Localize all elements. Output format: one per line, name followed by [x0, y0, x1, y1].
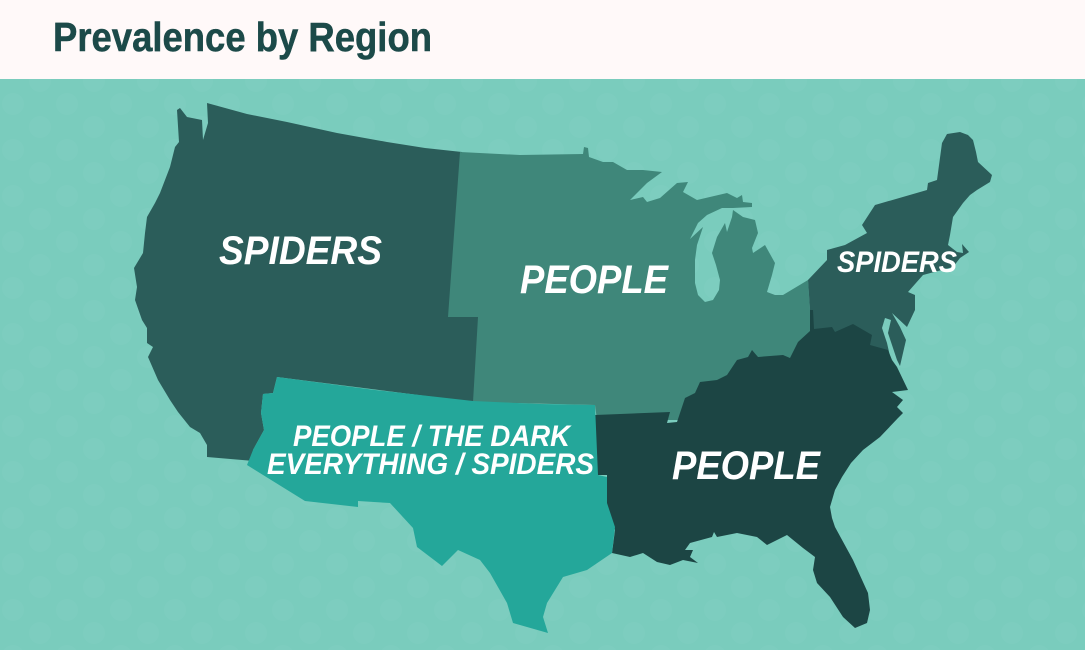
label: west spiders: SPIDERS [219, 229, 382, 273]
region: west [134, 103, 480, 461]
title: Prevalence by Region [53, 14, 432, 60]
region: northeast [808, 132, 992, 370]
header band [0, 0, 1085, 79]
region: midwest [448, 147, 813, 420]
label: southwest mixed: PEOPLE / THE DARK [293, 420, 573, 453]
region: southeast [595, 310, 908, 628]
label: northeast spiders: SPIDERS [837, 246, 957, 279]
label: midwest people: PEOPLE [520, 258, 669, 302]
label: southwest mixed: EVERYTHING / SPIDERS [267, 448, 594, 481]
label: southeast people: PEOPLE [672, 444, 821, 488]
label: southwest mixed [267, 420, 594, 481]
region: southwest [247, 377, 615, 633]
map of the United States [134, 103, 992, 633]
